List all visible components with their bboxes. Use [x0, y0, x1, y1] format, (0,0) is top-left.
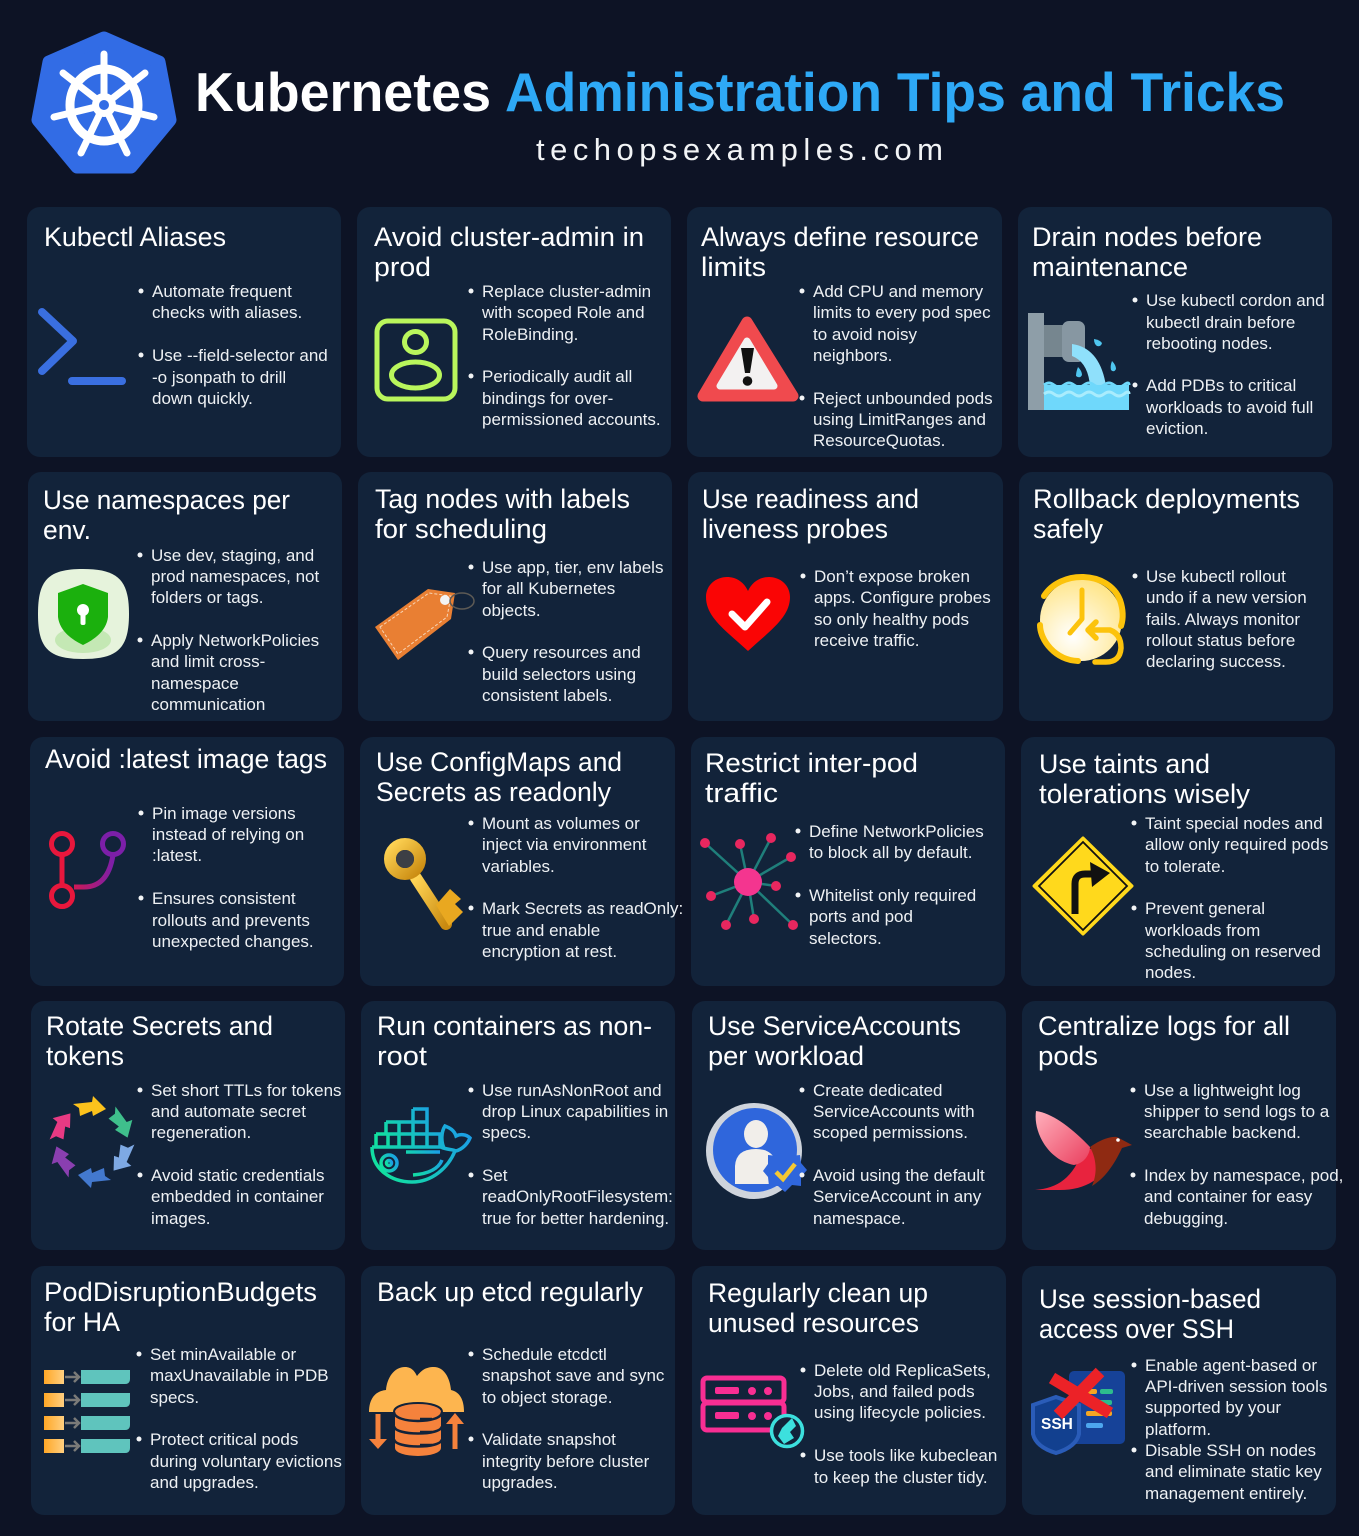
tip text: API-driven session tools — [1145, 1377, 1327, 1396]
heading: Use ServiceAccounts — [708, 1011, 961, 1041]
tip text: Taint special nodes and — [1145, 814, 1323, 833]
tip text: Reject unbounded pods — [813, 389, 993, 408]
tip text: namespace. — [813, 1209, 906, 1228]
panel: clean up — [692, 1266, 1006, 1515]
tip text: Use dev, staging, and — [151, 546, 314, 565]
icon: SSH shield with cross — [1033, 1371, 1125, 1453]
tip text: snapshot save and sync — [482, 1366, 665, 1385]
heading: tokens — [46, 1041, 124, 1071]
heading: Avoid cluster-admin in — [374, 222, 644, 252]
tip text — [800, 1081, 985, 1228]
tip text: Set minAvailable or — [150, 1345, 296, 1364]
icon: user card — [377, 321, 455, 399]
icon: orange tag — [375, 589, 474, 660]
heading: limits — [701, 252, 766, 282]
panel: readiness probes — [688, 472, 1003, 721]
tip text: Replace cluster-admin — [482, 282, 651, 301]
tip text — [138, 282, 328, 408]
panel: Tag nodes — [358, 472, 672, 721]
tip text: ResourceQuotas. — [813, 431, 945, 450]
heading: unused resources — [708, 1308, 919, 1338]
tip text — [136, 1345, 342, 1492]
icon: green shield — [38, 569, 129, 659]
tip text: variables. — [482, 857, 555, 876]
tip text: ServiceAccount in any — [813, 1187, 982, 1206]
tip text: Validate snapshot — [482, 1430, 616, 1449]
heading: Kubectl Aliases — [44, 222, 226, 252]
tip text: Query resources and — [482, 643, 641, 662]
tip text: true and enable — [482, 921, 600, 940]
tip text — [468, 1345, 665, 1492]
tip text: Set short TTLs for tokens — [151, 1081, 342, 1100]
tip text: Use runAsNonRoot and — [482, 1081, 662, 1100]
icon: kubernetes logo — [38, 38, 170, 167]
tip text: kubectl drain before — [1146, 313, 1295, 332]
panel: ServiceAccounts — [692, 1001, 1006, 1250]
tip text: Use app, tier, env labels — [482, 558, 663, 577]
tip text: declaring success. — [1146, 652, 1286, 671]
heading: Use session-based — [1039, 1284, 1261, 1314]
tip text: fails. Always monitor — [1146, 610, 1300, 629]
tip text: to tolerate. — [1145, 857, 1225, 876]
tip text: platform. — [1145, 1420, 1211, 1439]
tip text — [138, 1081, 342, 1228]
panel: Avoid cluster-admin — [357, 207, 671, 457]
tip text: readOnlyRootFilesystem: — [482, 1187, 673, 1206]
tip text: Protect critical pods — [150, 1430, 298, 1449]
tip text: to block all by default. — [809, 843, 972, 862]
icon: drain pipe — [1028, 313, 1129, 410]
heading: for HA — [44, 1307, 120, 1337]
heading: Always define resource — [701, 222, 979, 252]
tip text: prod namespaces, not — [151, 567, 319, 586]
icon: clock with undo arrow — [1040, 577, 1123, 662]
tip text: -o jsonpath to drill — [152, 368, 286, 387]
tip text: to keep the cluster tidy. — [814, 1468, 988, 1487]
tip text: embedded in container — [151, 1187, 324, 1206]
tip text: apps. Configure probes — [814, 588, 991, 607]
tip text: folders or tags. — [151, 588, 263, 607]
panel: ConfigMaps — [360, 737, 683, 986]
tip text: Use --field-selector and — [152, 346, 328, 365]
icon: SSH shield with cross: SSH — [1041, 1416, 1073, 1433]
heading: Back up etcd regularly — [377, 1277, 643, 1307]
tip text: Don’t expose broken — [814, 567, 970, 586]
tip text: rollout status before — [1146, 631, 1295, 650]
panel: taints — [1021, 737, 1335, 986]
tip text: using LimitRanges and — [813, 410, 986, 429]
heading: maintenance — [1032, 252, 1188, 282]
heading: Secrets as readonly — [376, 777, 611, 807]
icon: docker whale — [372, 1109, 470, 1182]
tip text: Apply NetworkPolicies — [151, 631, 319, 650]
tip text: Index by namespace, pod, — [1144, 1166, 1343, 1185]
tip text: Enable agent-based or — [1145, 1356, 1317, 1375]
tip text: ports and pod — [809, 907, 913, 926]
tip text — [1130, 1081, 1343, 1228]
tip text: nodes. — [1145, 963, 1196, 982]
tip text: rollouts and prevents — [152, 911, 310, 930]
tip text: Periodically audit all — [482, 367, 632, 386]
tip text: integrity before cluster — [482, 1452, 650, 1471]
heading: PodDisruptionBudgets — [44, 1277, 317, 1307]
tip text: management entirely. — [1145, 1484, 1307, 1503]
tip text — [138, 804, 314, 951]
tip text: and automate secret — [151, 1102, 306, 1121]
tip text: for all Kubernetes — [482, 579, 615, 598]
tip text: Delete old ReplicaSets, — [814, 1361, 991, 1380]
tip text: and limit cross- — [151, 652, 265, 671]
tip text: so only healthy pods — [814, 610, 969, 629]
tip text: objects. — [482, 601, 541, 620]
tip text: down quickly. — [152, 389, 253, 408]
tip text: Whitelist only required — [809, 886, 976, 905]
tip text: with scoped Role and — [481, 303, 645, 322]
tip text: :latest. — [152, 846, 202, 865]
tip text: Add PDBs to critical — [1146, 376, 1296, 395]
tip text: allow only required pods — [1145, 835, 1328, 854]
tip text: and container for easy — [1144, 1187, 1313, 1206]
tip text: scoped permissions. — [813, 1123, 968, 1142]
heading: Centralize logs for all — [1038, 1011, 1290, 1041]
heading: root — [377, 1041, 428, 1071]
tip text: specs. — [482, 1123, 531, 1142]
tip text — [468, 1081, 673, 1228]
tip text: upgrades. — [482, 1473, 558, 1492]
heading: per workload — [708, 1041, 864, 1071]
tip text: Use kubectl cordon and — [1146, 291, 1325, 310]
tip text: instead of relying on — [152, 825, 304, 844]
tip text — [468, 282, 661, 429]
heading: Use readiness and — [702, 484, 919, 514]
tip text: true for better hardening. — [482, 1209, 669, 1228]
title: Kubernetes — [195, 61, 491, 123]
subtitle: techopsexamples.com — [536, 132, 943, 167]
tip text — [800, 1361, 997, 1487]
icon: heart with check — [706, 577, 790, 651]
tip text: and upgrades. — [150, 1473, 259, 1492]
heading: Tag nodes with labels — [375, 484, 630, 514]
heading: Use namespaces per — [43, 485, 290, 515]
icon: warning triangle — [703, 322, 793, 396]
tip text: Prevent general — [1145, 899, 1265, 918]
panel: PodDisruptionBudgets — [31, 1266, 345, 1515]
panel: rollback — [1019, 472, 1333, 721]
tip text: undo if a new version — [1146, 588, 1307, 607]
title: Administration Tips and Tricks — [505, 61, 1285, 123]
tip text — [796, 822, 984, 948]
heading: Use ConfigMaps and — [376, 747, 622, 777]
heading: liveness probes — [702, 514, 888, 544]
heading: safely — [1033, 514, 1103, 544]
heading: for scheduling — [375, 514, 547, 544]
tip text: Disable SSH on nodes — [1145, 1441, 1316, 1460]
tip text — [138, 546, 319, 714]
icon: golden key — [390, 844, 463, 926]
panel: Avoid latest — [30, 737, 344, 986]
heading: access over SSH — [1039, 1314, 1234, 1344]
icon: user badge — [706, 1103, 807, 1199]
tip text: Create dedicated — [813, 1081, 942, 1100]
tip text: rebooting nodes. — [1146, 334, 1273, 353]
tip text: namespace — [151, 674, 239, 693]
heading: Restrict inter-pod — [705, 748, 918, 778]
tip text: selectors. — [809, 929, 882, 948]
panel: Centralize logs — [1022, 1001, 1343, 1250]
tip text: using lifecycle policies. — [814, 1403, 986, 1422]
tip text: Avoid using the default — [813, 1166, 985, 1185]
tip text: unexpected changes. — [152, 932, 314, 951]
tip text: images. — [151, 1209, 211, 1228]
tip text: Use a lightweight log — [1144, 1081, 1301, 1100]
tip text: to object storage. — [482, 1388, 612, 1407]
heading: Drain nodes before — [1032, 222, 1262, 252]
panel: Drain nodes — [1018, 207, 1332, 457]
heading: env. — [43, 515, 91, 545]
tip text — [468, 814, 683, 961]
tip text: permissioned accounts. — [482, 410, 661, 429]
panel: Rotate Secrets — [31, 1001, 345, 1250]
tip text — [1132, 814, 1328, 982]
tip text — [1132, 1356, 1327, 1503]
tip text: encryption at rest. — [482, 942, 617, 961]
tip text: Automate frequent — [152, 282, 292, 301]
icon: rotation arrows — [43, 1096, 141, 1188]
heading: traffic — [705, 778, 778, 808]
tip text — [468, 558, 663, 705]
tip text: drop Linux capabilities in — [482, 1102, 668, 1121]
tip text: Define NetworkPolicies — [809, 822, 984, 841]
tip text: communication — [151, 695, 265, 714]
tip text: checks with aliases. — [152, 303, 302, 322]
icon: servers with cleanup badge — [703, 1378, 802, 1446]
tip text: Avoid static credentials — [151, 1166, 325, 1185]
tip text: maxUnavailable in PDB — [150, 1366, 329, 1385]
tip text: receive traffic. — [814, 631, 920, 650]
heading: pods — [1038, 1041, 1098, 1071]
panel: Always define resource limits — [687, 207, 1002, 457]
tip text: Mount as volumes or — [482, 814, 640, 833]
panel: session-based access — [1022, 1266, 1336, 1515]
tip text: Add CPU and memory — [813, 282, 984, 301]
tip text: eviction. — [1146, 419, 1208, 438]
heading: Use taints and — [1039, 749, 1210, 779]
tip text: shipper to send logs to a — [1144, 1102, 1330, 1121]
tip text — [1132, 567, 1307, 671]
tip text: limits to every pod spec — [813, 303, 991, 322]
tip text: Ensures consistent — [152, 889, 296, 908]
panel: Use namespaces — [28, 472, 342, 721]
heading: Rotate Secrets and — [46, 1011, 273, 1041]
tip text — [800, 567, 991, 650]
icon: terminal prompt — [42, 312, 122, 381]
tip text: regeneration. — [151, 1123, 251, 1142]
tip text: and eliminate static key — [1145, 1462, 1322, 1481]
tip text: during voluntary evictions — [150, 1452, 342, 1471]
tip text: Jobs, and failed pods — [814, 1382, 975, 1401]
tip text: to avoid noisy — [813, 325, 917, 344]
tip text: workloads to avoid full — [1145, 398, 1313, 417]
tip text — [1132, 291, 1325, 438]
tip text: ServiceAccounts with — [813, 1102, 975, 1121]
icon: git branch — [52, 834, 124, 906]
icon: cloud database — [369, 1367, 464, 1457]
icon: flow rows — [44, 1370, 130, 1453]
heading: Avoid :latest image tags — [45, 744, 327, 774]
heading: Rollback deployments — [1033, 484, 1300, 514]
panel: inter-pod traffic — [691, 737, 1005, 986]
tip text — [800, 282, 993, 450]
tip text: debugging. — [1144, 1209, 1228, 1228]
tip text: Mark Secrets as readOnly: — [482, 899, 683, 918]
tip text: scheduling on reserved — [1145, 942, 1321, 961]
panel: Kubectl Aliases — [27, 207, 341, 457]
tip text: workloads from — [1144, 921, 1260, 940]
tip text: Use tools like kubeclean — [814, 1446, 997, 1465]
icon: bird — [1035, 1111, 1132, 1190]
tip text: Schedule etcdctl — [482, 1345, 607, 1364]
tip text: Pin image versions — [152, 804, 296, 823]
heading: Regularly clean up — [708, 1278, 928, 1308]
tip text: Set — [482, 1166, 508, 1185]
tip text: specs. — [150, 1388, 199, 1407]
heading: Run containers as non- — [377, 1011, 652, 1041]
heading: prod — [374, 252, 431, 282]
tip text: build selectors using — [482, 665, 636, 684]
tip text: searchable backend. — [1144, 1123, 1301, 1142]
heading: tolerations wisely — [1039, 779, 1251, 809]
icon: road sign — [1034, 838, 1132, 934]
icon: network hub — [700, 833, 798, 930]
panel: etcd backup — [361, 1266, 675, 1515]
tip text: inject via environment — [482, 835, 647, 854]
panel: non-root — [361, 1001, 675, 1250]
tip text: Use kubectl rollout — [1146, 567, 1286, 586]
tip text: supported by your — [1145, 1398, 1281, 1417]
tip text: bindings for over- — [482, 389, 613, 408]
tip text: consistent labels. — [482, 686, 612, 705]
tip text: RoleBinding. — [482, 325, 578, 344]
tip text: neighbors. — [813, 346, 892, 365]
